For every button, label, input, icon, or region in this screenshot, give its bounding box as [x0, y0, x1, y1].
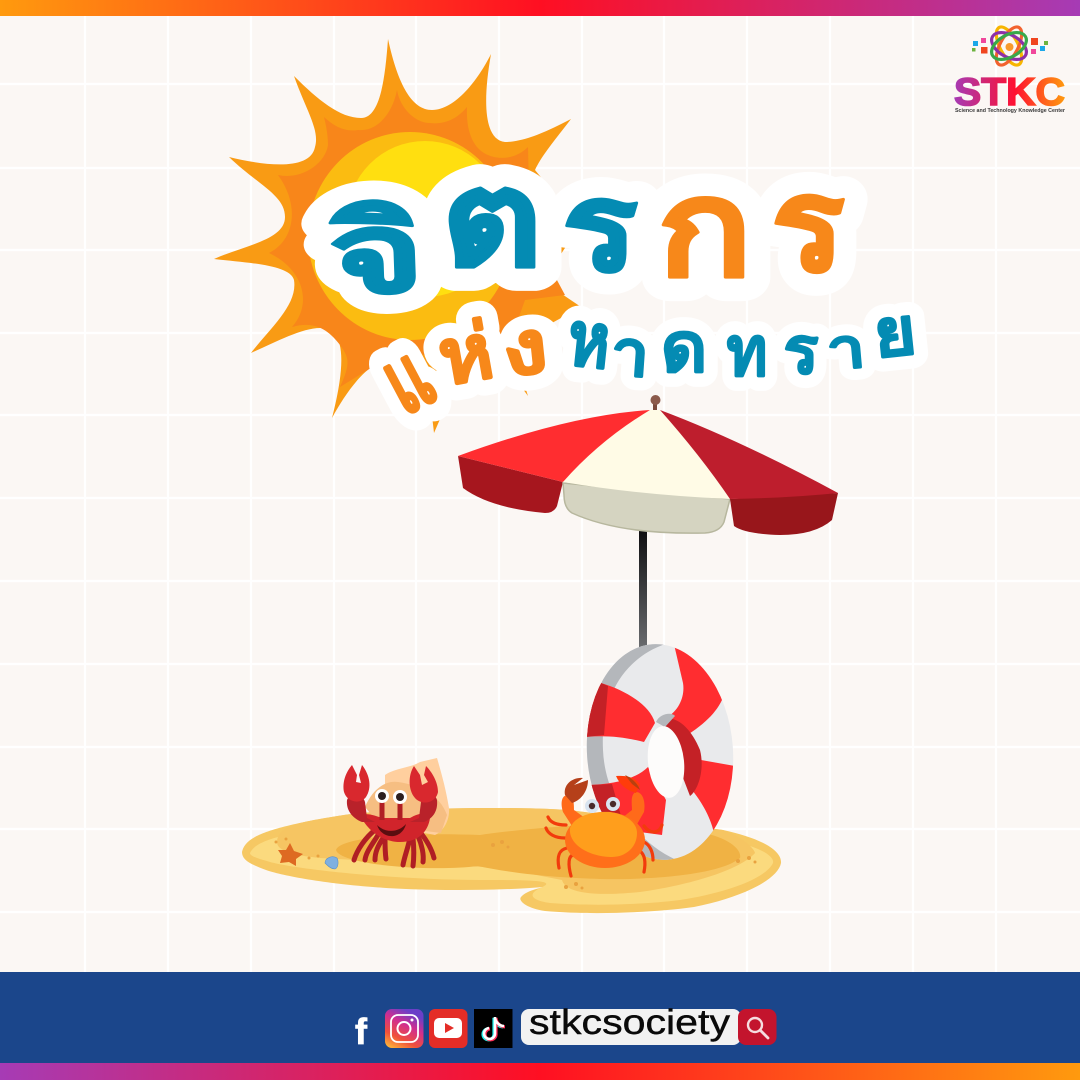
title line 2 outline: า: [609, 316, 652, 390]
subtitle letter: ด: [661, 309, 707, 386]
title letter: ก: [658, 153, 752, 304]
title line 2 outline: ง: [498, 305, 552, 392]
shell: [365, 758, 449, 835]
icon: facebook: f: [355, 1011, 368, 1052]
title letter: ร: [772, 154, 844, 298]
hermit crab: [343, 758, 449, 866]
subtitle letter: ท: [727, 313, 767, 390]
icon: tiktok: [474, 1009, 512, 1048]
sand outer lip: [242, 808, 781, 913]
left claw: [343, 765, 375, 822]
title letter: ต: [441, 145, 543, 294]
ring hole: [644, 724, 688, 800]
right claw: [616, 775, 645, 826]
ring shaded rim: [586, 644, 674, 860]
ring inner shadow top: [660, 719, 702, 796]
title line 2 outline: า: [824, 317, 868, 382]
icon: youtube: [429, 1009, 468, 1048]
subtitle letter: ห่: [432, 307, 499, 402]
title line 2 outline: ร: [783, 314, 819, 387]
umbrella left valance: [458, 456, 563, 513]
crab legs: [354, 830, 434, 866]
subtitle letter: า: [824, 317, 868, 382]
sun amber disc: [308, 132, 512, 340]
sun yellow core: [347, 141, 503, 297]
right claw: [410, 766, 438, 822]
sun: [214, 39, 581, 433]
search box: [521, 1009, 741, 1045]
umbrella pole: [639, 530, 647, 650]
subtitle letter: ห: [564, 296, 615, 384]
crab eyes: [585, 797, 620, 813]
icon: instagram: [385, 1009, 424, 1048]
sun inner rays: [269, 90, 565, 387]
subtitle letter: ร: [783, 314, 819, 387]
crab mouth: [377, 824, 406, 836]
title letter: ร: [562, 159, 638, 296]
umbrella cream panel: [563, 410, 730, 499]
logo: STKC: [954, 23, 1065, 114]
sand upper layer: [277, 808, 755, 894]
life ring: [586, 644, 733, 860]
umbrella right valance: [730, 493, 838, 535]
footer band: [0, 972, 1080, 1063]
title line 2 outline: ท: [727, 313, 767, 390]
title line 1 outline: ก: [658, 153, 752, 304]
sand light band: [250, 825, 773, 905]
ring stripe: lower right: [694, 760, 733, 830]
sun outer rays: [214, 39, 581, 433]
top gradient bar: [0, 0, 1080, 16]
title line 1: [327, 145, 844, 318]
subtitle letter: า: [609, 316, 652, 390]
logo wordmark: STKC: [954, 71, 1065, 114]
search handle text: stkcsociety: [529, 1003, 731, 1042]
title line 2 outline: ห: [564, 296, 615, 384]
title line 2: [365, 293, 920, 433]
icon: seashell: [325, 857, 338, 869]
crab legs: [546, 817, 662, 876]
crab eye stalks: [382, 800, 400, 820]
ring stripe: left: [585, 680, 655, 742]
ring stripe: top right: [672, 648, 722, 733]
left claw: [562, 778, 588, 826]
title line 2 outline: ย: [870, 293, 920, 372]
title line 1 outline: ต: [441, 145, 543, 294]
umbrella centre valance: [563, 483, 730, 533]
title line 2 outline: แ: [365, 325, 450, 433]
icon: search button: [738, 1009, 776, 1045]
ring body: [580, 639, 740, 865]
orange crab: [546, 775, 662, 876]
subtitle letter: ง: [498, 305, 552, 392]
sand specks: [274, 838, 756, 890]
umbrella knob: [650, 395, 660, 412]
crab shell highlight: [570, 812, 637, 857]
title line 2 outline: ห่: [432, 307, 499, 402]
title line 2 outline: ด: [661, 309, 707, 386]
title line 2 outline: [365, 293, 920, 433]
beach umbrella: [458, 395, 838, 650]
sand island: [242, 808, 781, 913]
social row: [355, 1003, 776, 1052]
title line 1 outline: จิ: [327, 189, 426, 318]
sand shaded patches: [336, 825, 740, 879]
title line 1 outline: ร: [562, 159, 638, 296]
logo tagline: Science and Technology Knowledge Center: [955, 108, 1065, 114]
crab body: [360, 814, 430, 842]
crab shell: [565, 812, 645, 868]
bottom gradient bar: [0, 1063, 1080, 1080]
title line 1 outline: [327, 145, 844, 318]
subtitle letter: แ: [365, 325, 450, 433]
umbrella red panel: [458, 410, 650, 482]
title letter: จิ: [327, 189, 426, 318]
icon: starfish: [278, 843, 303, 866]
ring stripe: lower left: [585, 767, 666, 835]
crab eyes: [375, 789, 407, 804]
umbrella dark red panel: [660, 410, 838, 499]
subtitle letter: ย: [870, 293, 920, 372]
icon: atom: [972, 23, 1048, 69]
title line 1 outline: ร: [772, 154, 844, 298]
